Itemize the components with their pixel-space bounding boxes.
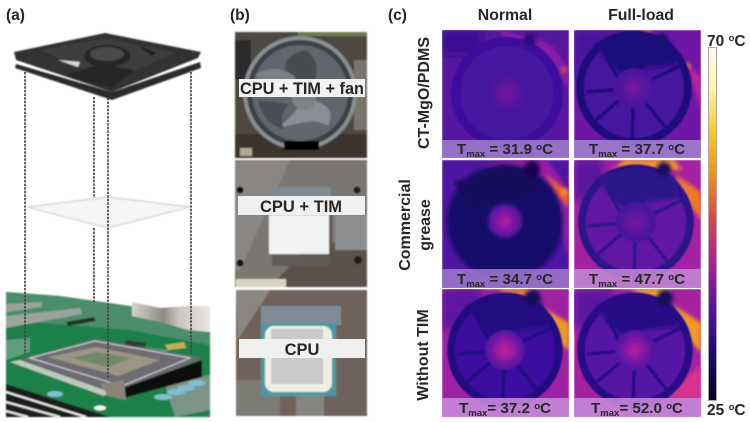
thermal image: CT-MgO/PDMS full-load, 37.7 C	[574, 30, 701, 160]
max label: 70 C: C	[734, 33, 746, 50]
Tmax label: C	[542, 141, 553, 158]
row label: Commercial grease: grease	[417, 199, 434, 251]
Tmax label: = 47.7	[617, 271, 668, 288]
panel c: thermal images	[397, 7, 746, 419]
photo: CPU + TIM	[235, 160, 367, 287]
thermal image: without TIM full-load, 52.0 C	[574, 289, 701, 419]
photo: CPU + TIM + fan	[235, 32, 367, 158]
Tmax label: o	[668, 272, 674, 283]
CPU socket	[10, 339, 202, 400]
photo: CPU + TIM + fan: CPU + TIM + fan	[240, 80, 364, 98]
Tmax label: max	[466, 279, 486, 290]
Tmax label: = 34.7	[485, 271, 536, 288]
colour bar legend	[707, 33, 746, 419]
gradient bar	[708, 48, 716, 400]
Tmax label: = 31.9	[485, 141, 536, 158]
thermal interface film	[27, 197, 190, 228]
Tmax label: = 52.0	[619, 400, 666, 417]
min label: 25 C: 25	[707, 402, 724, 419]
Tmax label: = 37.7	[617, 141, 668, 158]
Tmax label: C	[672, 400, 683, 417]
column heading: Full-load: Full-load	[608, 7, 674, 24]
row label: Commercial grease: Commercial	[397, 179, 414, 271]
Tmax label	[442, 140, 569, 160]
Tmax label: T	[591, 400, 600, 417]
thermal image: without TIM normal, 37.2 C	[442, 289, 569, 419]
Tmax label	[574, 269, 701, 290]
cooling fan	[14, 33, 201, 100]
panel b: photographs	[235, 32, 367, 416]
min label: 25 C: C	[734, 402, 746, 419]
Tmax label: C	[674, 141, 685, 158]
Tmax label: = 37.2	[487, 400, 534, 417]
Tmax label: C	[674, 271, 685, 288]
Tmax label: C	[542, 271, 553, 288]
Tmax label: T	[457, 271, 466, 288]
Tmax label: T	[589, 141, 598, 158]
Tmax label	[442, 398, 569, 419]
dashed guide lines	[25, 72, 191, 378]
column heading: Normal: Normal	[478, 7, 532, 24]
Tmax label: o	[668, 142, 674, 153]
motherboard	[6, 292, 210, 417]
Tmax label: o	[534, 401, 540, 412]
photo: CPU	[236, 290, 367, 416]
row label: CT-MgO/PDMS: CT-MgO/PDMS	[416, 37, 433, 149]
Tmax label	[442, 269, 569, 290]
Tmax label	[574, 140, 701, 160]
max label: 70 C: o	[729, 33, 735, 44]
Tmax label: o	[536, 272, 542, 283]
Tmax label: max	[598, 149, 618, 160]
Tmax label: T	[589, 271, 598, 288]
photo: CPU: CPU	[285, 341, 319, 359]
Tmax label: o	[536, 142, 542, 153]
thermal image: commercial grease normal, 34.7 C	[442, 160, 569, 290]
thermal image: CT-MgO/PDMS normal, 31.9 C	[442, 30, 569, 160]
row label: Without TIM: Without TIM	[415, 309, 432, 401]
min label: 25 C: o	[729, 402, 735, 413]
Tmax label: max	[468, 408, 488, 419]
Tmax label: T	[457, 141, 466, 158]
Tmax label: max	[466, 149, 486, 160]
Tmax label: o	[666, 401, 672, 412]
Tmax label	[574, 398, 701, 419]
thermal image: commercial grease full-load, 47.7 C	[574, 160, 701, 290]
Tmax label: max	[598, 279, 618, 290]
Tmax label: C	[540, 400, 551, 417]
photo: CPU + TIM: CPU + TIM	[260, 198, 342, 216]
Tmax label: T	[459, 400, 468, 417]
Tmax label: max	[600, 408, 620, 419]
panel a: exploded CPU cooler assembly	[6, 33, 210, 417]
max label: 70 C: 70	[707, 33, 724, 50]
panel label: (b): (b)	[230, 7, 250, 24]
panel label: (c): (c)	[388, 7, 407, 24]
panel label: (a): (a)	[6, 7, 25, 24]
